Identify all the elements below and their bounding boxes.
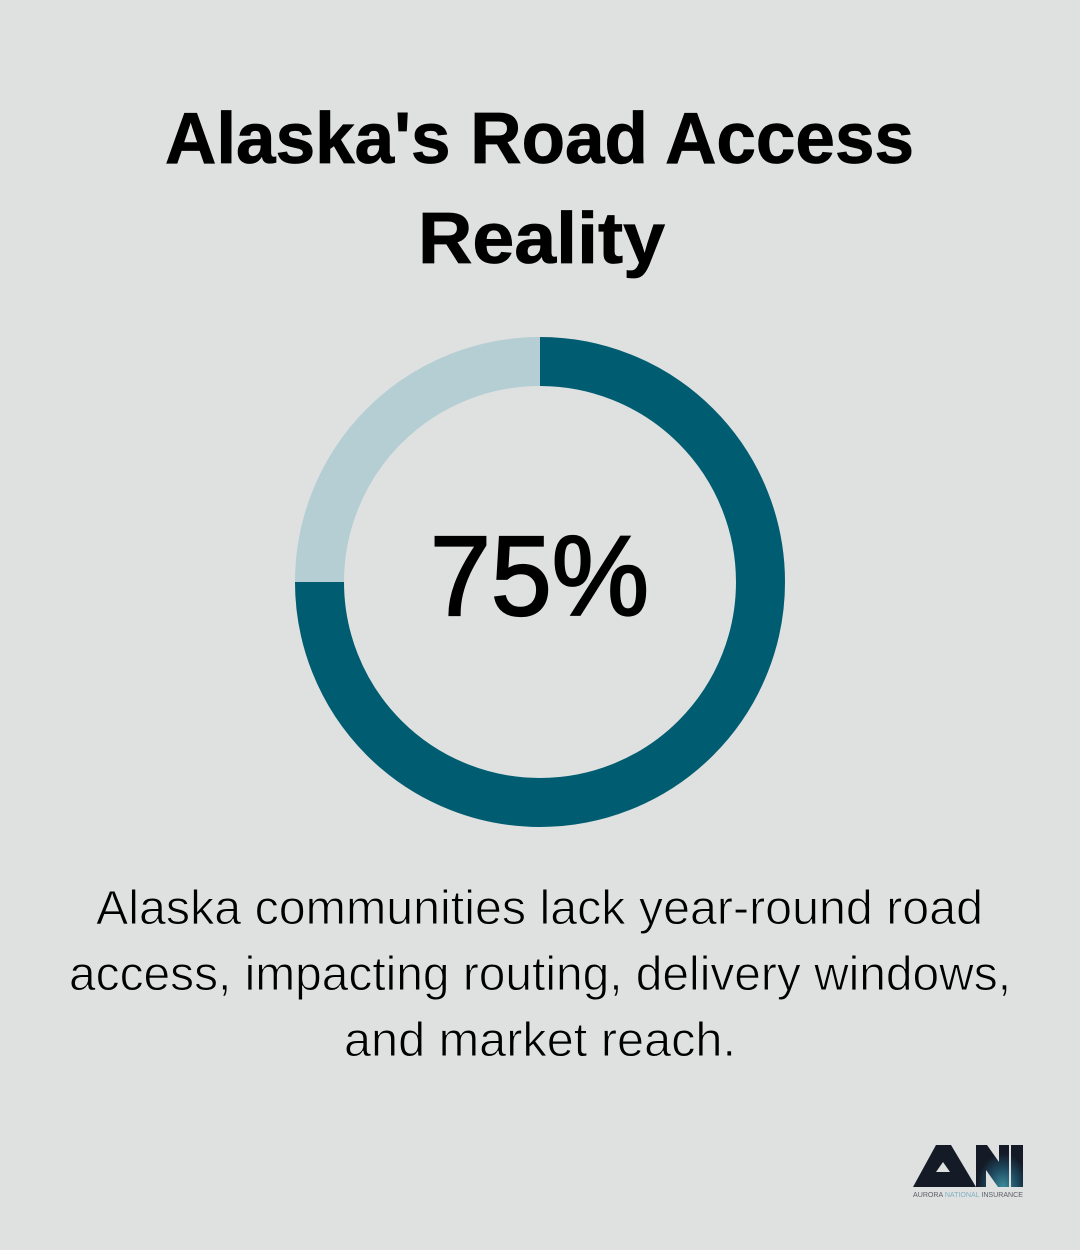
logo: ANI: AURORA NATIONAL INSURANCE <box>913 1190 1023 1199</box>
description text: Alaska communities lack year-round road <box>96 882 983 935</box>
description text: access, impacting routing, delivery windows, <box>69 948 1011 1001</box>
title: Reality <box>418 199 665 279</box>
title <box>165 99 914 279</box>
description text: and market reach. <box>344 1014 736 1067</box>
description text <box>69 882 1011 1067</box>
donut chart: 75% <box>320 362 760 802</box>
logo: ANI <box>913 1145 1023 1199</box>
title: Alaska's Road Access <box>165 99 914 179</box>
donut value: 75% <box>430 513 649 639</box>
